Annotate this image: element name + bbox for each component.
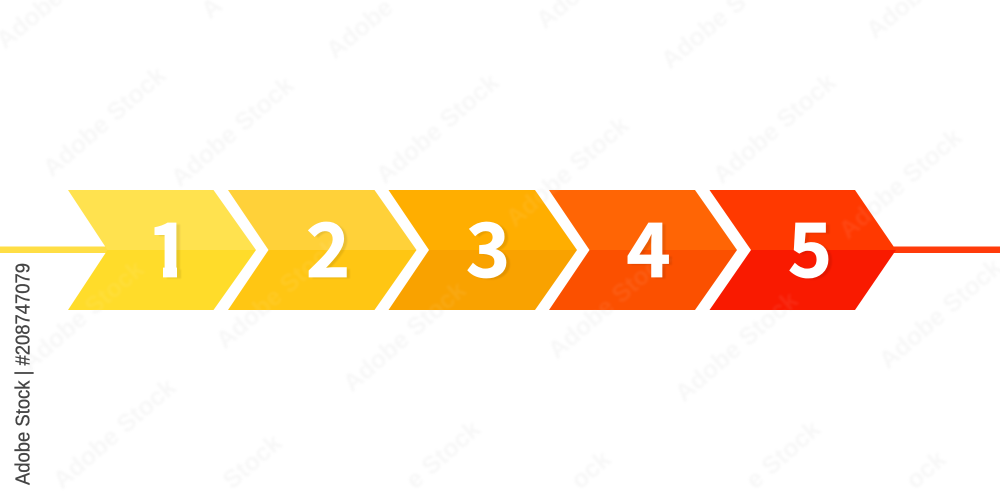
arrow 2 [228, 190, 416, 310]
number shadows: 5 [792, 192, 836, 300]
watermark over arrows: Adobe Stock [211, 233, 344, 355]
watermark over arrows: Adobe Stock [501, 111, 634, 233]
arrow 5 [710, 190, 896, 310]
watermark pattern: Adobe Stock [48, 373, 181, 495]
watermark over arrows: Adobe Stock [338, 276, 471, 398]
number 5: 5 [788, 190, 832, 299]
watermark pattern: Adobe Stock [38, 61, 171, 183]
number shadows [159, 224, 832, 280]
watermark pattern: ock [566, 445, 617, 495]
watermark pattern: Adobe Stock [371, 68, 504, 190]
arrow 4 [549, 190, 737, 310]
number shadows: 3 [470, 192, 514, 300]
right connector line [893, 246, 1000, 253]
watermark pattern: ock [901, 445, 952, 495]
number shadows: 2 [309, 192, 354, 300]
watermark pattern: Adobe Stock [211, 233, 344, 355]
watermark over arrows: Adobe [166, 120, 243, 193]
number shadows: 4 [630, 192, 674, 300]
number 3: 3 [466, 190, 510, 299]
watermark over arrows: Adobe Stock [670, 286, 803, 408]
watermark pattern: Adobe Stock [338, 276, 471, 398]
watermark pattern: Stock [218, 429, 287, 495]
watermark over arrows [16, 111, 911, 408]
watermark pattern: Adobe Stock [16, 255, 149, 377]
left connector line [0, 246, 110, 253]
vertical stock id text: Adobe Stock | #208747079 [12, 263, 34, 485]
arrow 1 [68, 190, 256, 310]
watermark pattern: Adobe Stock [670, 286, 803, 408]
watermark pattern: e Stock [401, 415, 486, 495]
watermark pattern: Adobe Stock [834, 123, 967, 245]
watermark over arrows: Adobe Stock [16, 255, 149, 377]
arrow 3 [388, 190, 577, 310]
number 2: 2 [306, 190, 350, 299]
infographic canvas [0, 190, 1000, 486]
watermark pattern: Adobe Stock [708, 68, 841, 190]
number 4: 4 [626, 190, 671, 299]
number shadows: 1 [151, 192, 195, 300]
number 1: 1 [147, 190, 191, 299]
watermark pattern: e Stock [741, 415, 826, 495]
watermark over arrows: Adobe [834, 172, 911, 245]
watermark pattern: Adobe Stock [166, 71, 299, 193]
watermark over arrows: Adobe Stock [543, 243, 676, 365]
watermark pattern: Adobe Stock [543, 243, 676, 365]
watermark pattern: Adobe Stock [501, 111, 634, 233]
